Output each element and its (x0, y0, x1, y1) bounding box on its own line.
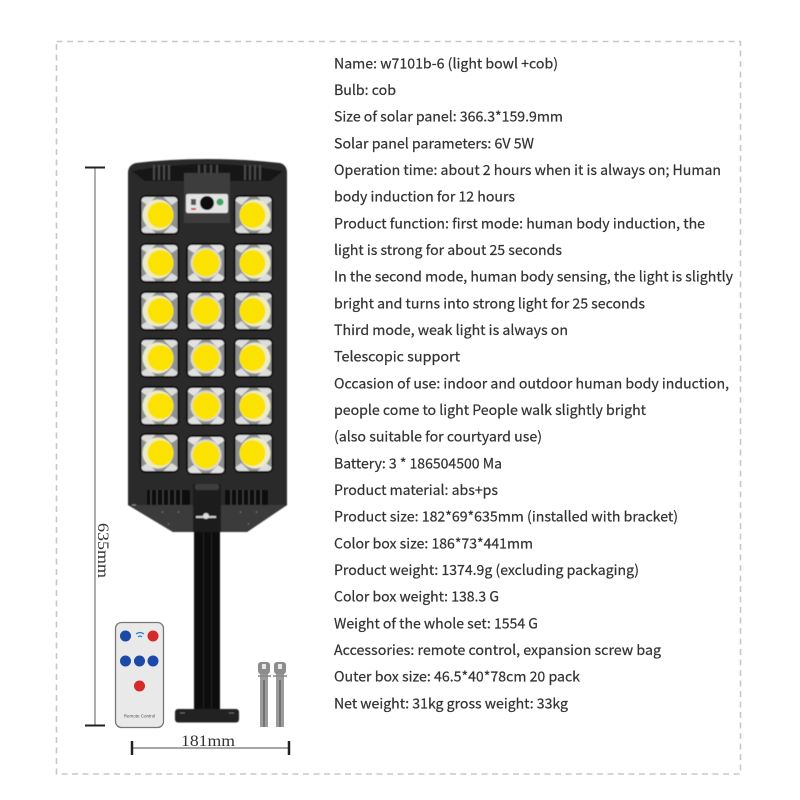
mounting base (175, 709, 239, 722)
specification list: Outer box size: 46.5*40*78cm 20 pack (334, 667, 580, 687)
specification list: Solar panel parameters: 6V 5W (334, 133, 534, 153)
remote control: Remote Control (124, 714, 155, 718)
specification list: Battery: 3 * 186504500 Ma (334, 453, 502, 473)
expansion screws (258, 662, 287, 727)
specification list: Product material: abs+ps (334, 480, 498, 500)
lamp pole (194, 525, 220, 713)
specification list: Third mode, weak light is always on (334, 320, 568, 340)
specification list: Color box weight: 138.3 G (334, 587, 499, 607)
pole collar (193, 484, 221, 532)
specification list: In the second mode, human body sensing, the light is slightly (334, 267, 734, 287)
specification list: Net weight: 31kg gross weight: 33kg (334, 693, 568, 713)
specification list: Product weight: 1374.9g (excluding packaging) (334, 560, 639, 580)
specification list: (also suitable for courtyard use) (334, 427, 542, 447)
specification list: Size of solar panel: 366.3*159.9mm (334, 107, 563, 127)
specification list: Telescopic support (334, 347, 461, 367)
specification list: Product function: first mode: human body induction, the (334, 213, 705, 233)
remote control (116, 622, 164, 728)
sensor panel (184, 173, 230, 223)
specification list (334, 53, 734, 713)
specification list: Accessories: remote control, expansion screw bag (334, 640, 661, 660)
height dimension line 635mm: 635mm (94, 523, 111, 578)
solar street lamp (128, 159, 287, 722)
specification list: Bulb: cob (334, 80, 396, 100)
specification list: Color box size: 186*73*441mm (334, 533, 533, 553)
specification list: Operation time: about 2 hours when it is always on; Human (334, 160, 721, 180)
width dimension line 181mm (132, 733, 289, 755)
dashed frame (56, 42, 740, 774)
light modules (140, 195, 274, 475)
specification list: people come to light People walk slightly bright (334, 400, 647, 420)
specification list: Occasion of use: indoor and outdoor human body induction, (334, 373, 729, 393)
specification list: Product size: 182*69*635mm (installed with bracket) (334, 507, 678, 527)
specification list: light is strong for about 25 seconds (334, 240, 562, 260)
specification list: Weight of the whole set: 1554 G (334, 613, 538, 633)
width dimension line 181mm: 181mm (181, 733, 235, 750)
height dimension line 635mm (85, 167, 111, 726)
lamp body (128, 159, 287, 532)
specification list: bright and turns into strong light for 25 seconds (334, 293, 645, 313)
specification list: body induction for 12 hours (334, 187, 515, 207)
specification list: Name: w7101b-6 (light bowl +cob) (334, 53, 558, 73)
